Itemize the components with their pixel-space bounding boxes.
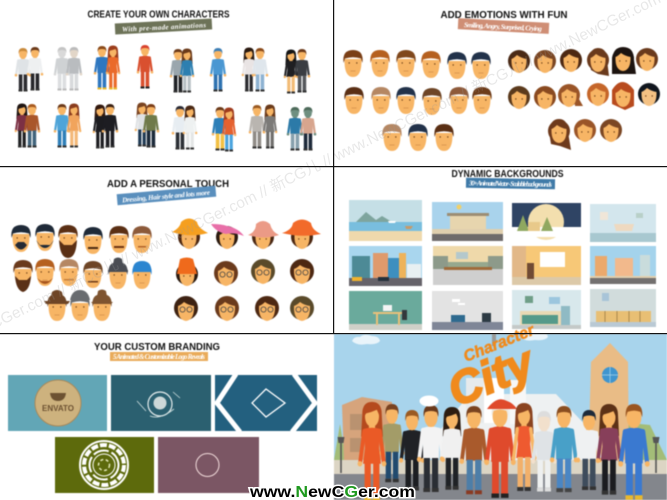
logo card: envato badge: ENVATO — [42, 404, 74, 413]
female faces — [508, 47, 660, 150]
logo card: envato badge — [8, 375, 107, 431]
logo: character city: Character — [461, 322, 538, 366]
subtitle ribbon: animated and customizable logo reveals: 5 Animated & Customizable Logo Reveals — [113, 353, 205, 361]
background tile: beach — [349, 200, 422, 241]
title: add emotions with fun: ADD EMOTIONS WITH FUN — [440, 9, 568, 21]
logo card: concentric wheel — [55, 437, 154, 493]
subtitle ribbon: smiling, angry, surprised, crying — [458, 18, 549, 34]
santa hat — [487, 399, 517, 409]
building: clock tower — [588, 343, 629, 470]
panel: character city scene — [334, 322, 667, 500]
character row 2 — [15, 102, 316, 152]
subtitle ribbon: with pre-made animations: With pre-made animations — [122, 21, 206, 34]
background tile: kitchen counter — [590, 204, 656, 242]
panel: add emotions with fun — [343, 9, 660, 151]
background tile: green office — [349, 291, 422, 330]
background tile: meeting room — [512, 246, 581, 285]
subtitle ribbon: animated vector backgrounds: 30+ Animated Vector - Scalable backgrounds — [468, 179, 552, 189]
character row 1 — [15, 45, 310, 94]
logo card: thin circle reveal — [158, 437, 259, 493]
panel: your custom branding — [8, 341, 317, 493]
logo card: line circle reveal — [111, 375, 211, 431]
panel: dynamic backgrounds — [349, 169, 656, 330]
street lamps — [338, 437, 660, 473]
title: your custom branding: YOUR CUSTOM BRANDING — [94, 341, 220, 353]
title: create your own characters: CREATE YOUR OWN CHARACTERS — [88, 8, 230, 20]
chef hat — [420, 396, 438, 406]
logo: character city: City — [440, 335, 543, 416]
panel dividers — [0, 0, 667, 334]
panel: create your own characters — [15, 8, 316, 152]
background tile: city buildings — [349, 246, 422, 286]
title: dynamic backgrounds: DYNAMIC BACKGROUNDS — [452, 169, 564, 180]
background tile: street shelter — [432, 202, 503, 241]
background tile: lounge — [432, 291, 503, 330]
subtitle ribbon: with pre-made animations — [115, 18, 212, 35]
background tile: night village — [512, 203, 581, 240]
background tile: kitchen — [512, 290, 581, 329]
subtitle ribbon: dressing, hair style and lots more: Dressing, Hair style and lots more — [121, 189, 210, 204]
building: left townhouse — [342, 397, 392, 460]
sky — [334, 334, 667, 474]
pavement and road — [334, 460, 667, 500]
male faces with beards and hats — [11, 224, 152, 321]
character line-up — [358, 396, 650, 500]
logo card: diamond reveal — [215, 374, 317, 432]
background tile: cafe interior — [433, 246, 503, 285]
background tile: town square — [590, 246, 656, 284]
clouds — [352, 331, 548, 345]
subtitle ribbon: smiling, angry, surprised, crying: Smiling, Angry, Surprised, Crying — [464, 21, 543, 33]
female faces with hats and glasses — [172, 218, 321, 321]
hills — [334, 420, 667, 460]
male faces — [343, 50, 492, 151]
title: add a personal touch: ADD A PERSONAL TOUCH — [107, 178, 229, 190]
background tile: bar counter — [590, 289, 656, 327]
building: church — [440, 334, 590, 462]
panel: add a personal touch — [11, 178, 321, 321]
